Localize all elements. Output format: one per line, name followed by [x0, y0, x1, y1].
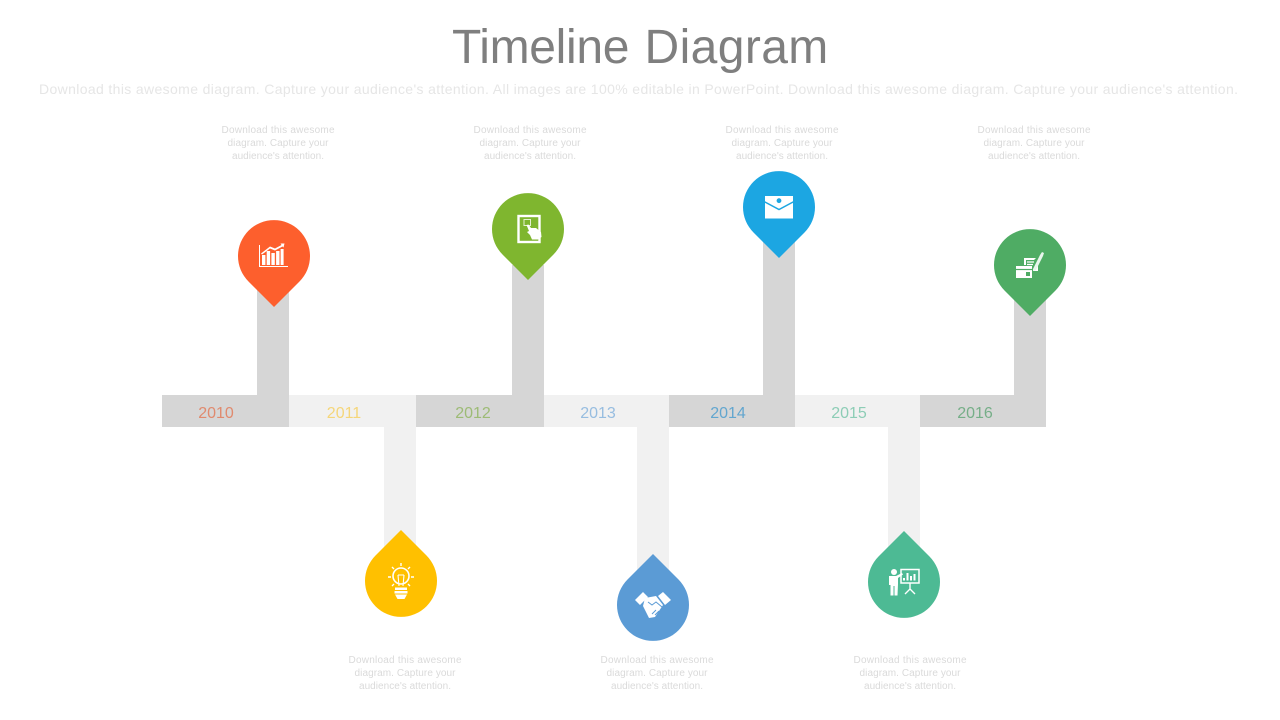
text block 2012 [474, 125, 587, 162]
text block 2014: audience's attention. [736, 151, 828, 162]
text block 2015: Download this awesome [854, 655, 967, 666]
year labels: 2013 [580, 405, 616, 422]
pin 2016: documents and pen icon [994, 229, 1066, 316]
title: Timeline [452, 21, 629, 74]
pin 2014: envelope icon [743, 171, 815, 258]
text block 2010: diagram. Capture your [228, 138, 329, 149]
year labels: 2015 [831, 405, 867, 422]
text block 2010 [222, 125, 335, 162]
pin 2010: chart icon [238, 220, 310, 307]
year labels: 2012 [455, 405, 491, 422]
year labels: 2011 [327, 405, 361, 422]
text block 2010: Download this awesome [222, 125, 335, 136]
pin 2012: tablet touch icon [492, 193, 564, 280]
pin 2013: handshake icon [617, 554, 689, 641]
timeline bar with stems [162, 240, 1046, 576]
year labels: 2010 [198, 405, 234, 422]
text block 2012: diagram. Capture your [480, 138, 581, 149]
text block 2011: audience's attention. [359, 681, 451, 692]
subtitle: Download this awesome diagram. Capture your audience's attention. All images are 100% editable in PowerPoint. Download this awesome diagram. Capture your audience's attention. [39, 81, 1238, 97]
text block 2015: diagram. Capture your [860, 668, 961, 679]
pin 2011: light bulb icon [365, 530, 437, 617]
text block 2011: diagram. Capture your [354, 668, 456, 679]
text block 2013: diagram. Capture your [606, 668, 708, 679]
text block 2011: Download this awesome [348, 655, 462, 666]
text block 2012: Download this awesome [474, 125, 587, 136]
text block 2013: audience's attention. [611, 681, 703, 692]
text block 2014 [726, 125, 839, 162]
text block 2015: audience's attention. [864, 681, 956, 692]
text block 2016 [978, 125, 1091, 162]
text block 2016: audience's attention. [988, 151, 1080, 162]
text block 2011 [348, 655, 462, 692]
text block 2010: audience's attention. [232, 151, 324, 162]
year labels [198, 405, 993, 422]
text block 2012: audience's attention. [484, 151, 576, 162]
pin 2015: presenter icon [868, 531, 940, 618]
year labels: 2016 [957, 405, 993, 422]
text block 2014: diagram. Capture your [732, 138, 833, 149]
year labels: 2014 [710, 405, 746, 422]
text block 2016: diagram. Capture your [984, 138, 1085, 149]
text block 2015 [854, 655, 967, 692]
text block 2013 [600, 655, 714, 692]
text block 2014: Download this awesome [726, 125, 839, 136]
text block 2016: Download this awesome [978, 125, 1091, 136]
title: Diagram [644, 21, 829, 74]
text block 2013: Download this awesome [600, 655, 714, 666]
